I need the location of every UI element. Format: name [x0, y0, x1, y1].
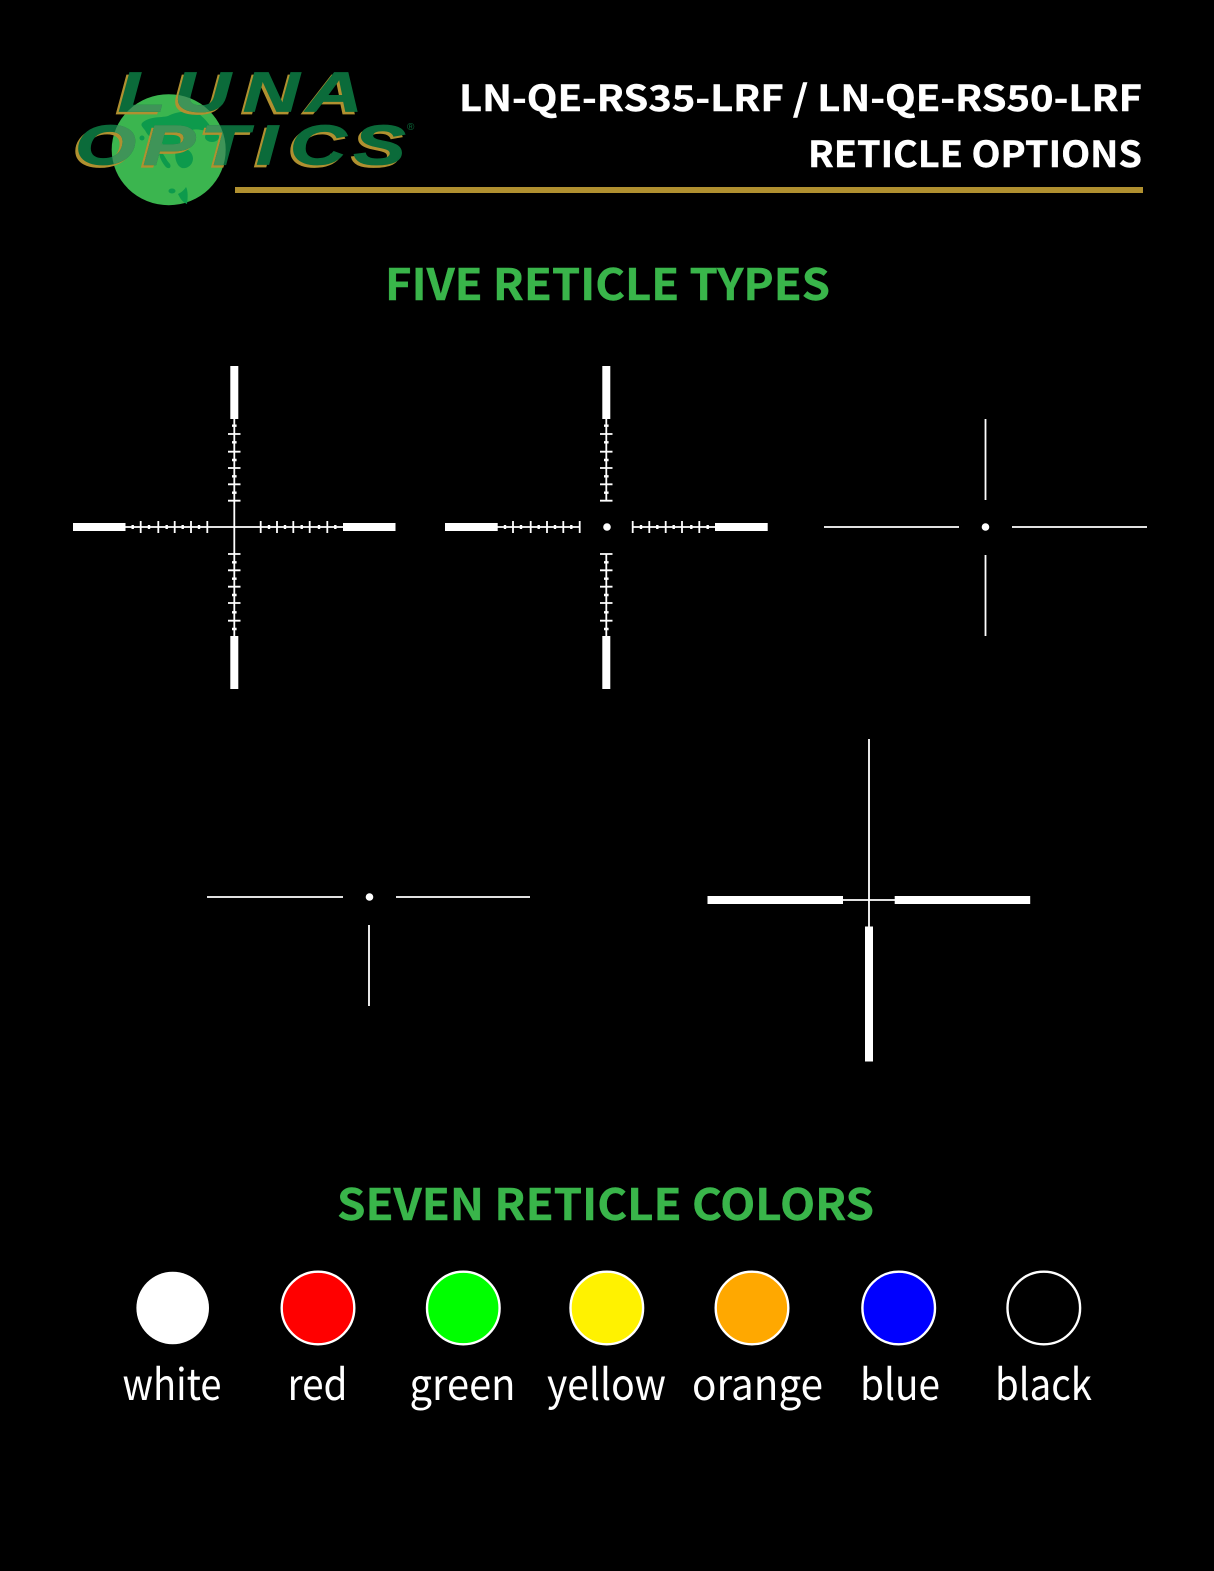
swatch: black: black [995, 1351, 1092, 1413]
swatch: green [410, 1272, 516, 1413]
swatch: white: white [122, 1351, 222, 1413]
swatch: orange: orange [692, 1351, 823, 1413]
logo wordmark over globe: LUNA [118, 60, 363, 124]
icon: globe [112, 94, 226, 205]
logo wordmark shadow: LUNA [115, 63, 360, 126]
swatch: black [995, 1272, 1092, 1413]
logo wordmark over globe: OPTICS [75, 113, 406, 177]
swatch: red [282, 1272, 354, 1413]
logo wordmark shadow [72, 63, 403, 179]
reticle 4: thin three-way with centre dot [207, 893, 530, 1006]
logo: Luna Optics [72, 60, 415, 205]
logo wordmark [75, 60, 406, 177]
heading: seven reticle colors: SEVEN RETICLE COLORS [337, 1171, 874, 1233]
swatch: red: red [288, 1351, 348, 1413]
swatch: yellow: yellow [547, 1351, 666, 1413]
heading: reticle options: RETICLE OPTIONS [808, 127, 1142, 178]
reticle 1: full mil-dot crosshair [73, 366, 396, 689]
logo wordmark shadow: OPTICS [72, 116, 403, 179]
swatch: blue: blue [860, 1351, 940, 1413]
reticle 5: heavy post crosshair [708, 739, 1030, 1062]
swatch: blue [860, 1272, 940, 1413]
registered mark: ® [407, 122, 415, 133]
logo wordmark: OPTICS [75, 113, 406, 177]
reticle 3: thin four-way with centre dot [824, 419, 1147, 636]
swatch: white [122, 1272, 222, 1413]
logo wordmark: LUNA [118, 60, 363, 124]
reticle 2: mil-dot crosshair with centre dot [445, 366, 768, 689]
swatch: yellow [547, 1272, 666, 1413]
swatch: green: green [410, 1351, 516, 1413]
header rule [235, 187, 1143, 193]
swatch: orange [692, 1272, 823, 1413]
logo wordmark over globe [112, 95, 226, 166]
heading: model names: LN-QE-RS35-LRF / LN-QE-RS50-LRF [459, 71, 1142, 122]
heading: five reticle types: FIVE RETICLE TYPES [385, 251, 830, 313]
